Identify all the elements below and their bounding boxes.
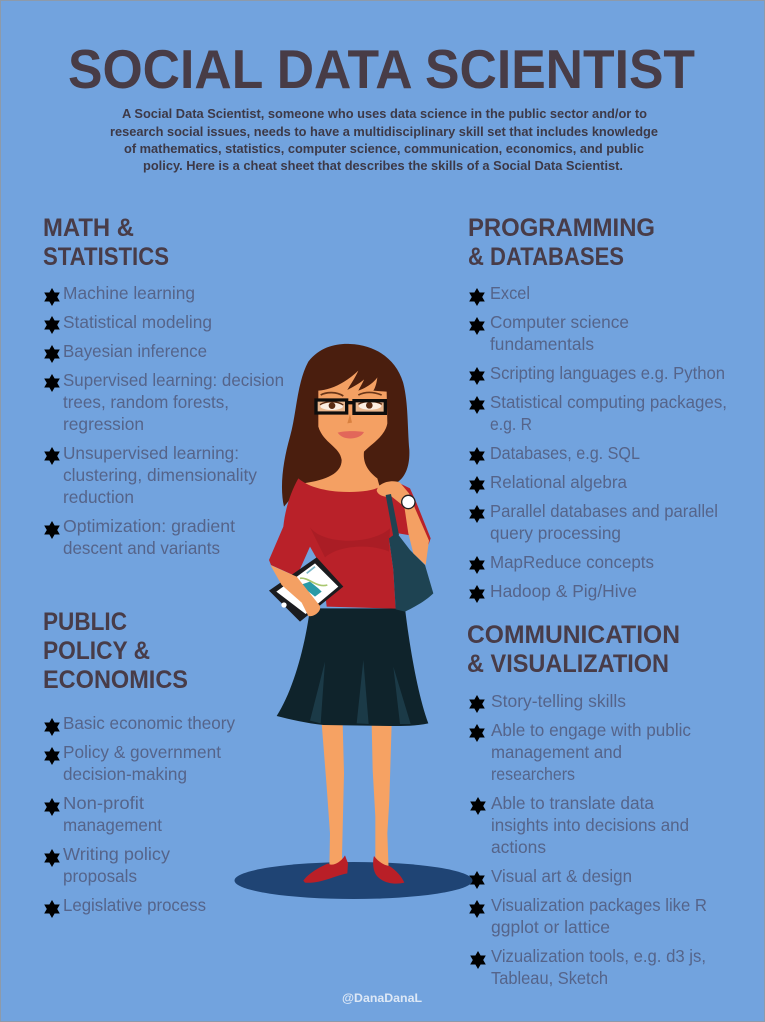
skill list: communication and visualization: Vizualization tools, e.g. d3 js, bbox=[491, 946, 706, 966]
skill list: programming and databases: Databases, e.g. SQL bbox=[490, 443, 640, 463]
skill list: public policy and economics bbox=[44, 713, 235, 918]
hair bbox=[282, 344, 409, 507]
intro text block: A Social Data Scientist, someone who uses data science in the public sector and/or to bbox=[122, 107, 647, 121]
skill list: communication and visualization: Visualization packages like R bbox=[491, 895, 707, 915]
right forearm and hand bbox=[377, 481, 429, 565]
skill list: communication and visualization: Visual art & design bbox=[491, 866, 632, 886]
skill list: programming and databases: e.g. R bbox=[490, 414, 532, 434]
heading: math and statistics bbox=[43, 214, 169, 271]
skill list: math and statistics: Optimization: gradient bbox=[63, 516, 235, 536]
skill list: programming and databases bbox=[469, 283, 727, 603]
skill list: programming and databases: Scripting languages e.g. Python bbox=[490, 363, 725, 383]
heading: public policy and economics: ECONOMICS bbox=[43, 666, 188, 694]
skill list: math and statistics: clustering, dimensionality bbox=[63, 465, 257, 485]
bag strap bbox=[386, 494, 399, 537]
glasses bbox=[316, 400, 385, 413]
skill list: communication and visualization: Tableau, Sketch bbox=[491, 968, 608, 988]
legs and shoes bbox=[303, 723, 404, 884]
heading: programming and databases: & DATABASES bbox=[468, 243, 624, 271]
skill list: public policy and economics: Policy & government bbox=[63, 742, 221, 762]
skill list: public policy and economics: decision-making bbox=[63, 764, 187, 784]
title: SOCIAL DATA SCIENTIST bbox=[68, 38, 695, 100]
skill list: public policy and economics: proposals bbox=[63, 866, 137, 886]
heading: communication and visualization bbox=[467, 621, 680, 678]
skill list: math and statistics: Bayesian inference bbox=[63, 341, 207, 361]
skill list: public policy and economics: Writing policy bbox=[63, 844, 170, 864]
illustration: woman data scientist bbox=[234, 344, 472, 899]
skill list: math and statistics: reduction bbox=[63, 487, 134, 507]
skill list: communication and visualization: management and bbox=[491, 742, 622, 762]
lips bbox=[338, 431, 364, 439]
heading: programming and databases bbox=[468, 214, 655, 271]
skill list: communication and visualization: Able to engage with public bbox=[491, 720, 691, 740]
tablet bbox=[269, 557, 343, 622]
skill list: math and statistics: descent and variants bbox=[63, 538, 220, 558]
skill list: programming and databases: Statistical computing packages, bbox=[490, 392, 727, 412]
heading: math and statistics: STATISTICS bbox=[43, 243, 169, 271]
skill list: math and statistics: Machine learning bbox=[63, 283, 195, 303]
tablet chart bbox=[300, 582, 322, 597]
panel: public policy and economics bbox=[43, 608, 235, 918]
intro text block: research social issues, needs to have a multidisciplinary skill set that includes knowledge bbox=[110, 125, 658, 139]
heading: math and statistics: MATH & bbox=[43, 214, 134, 242]
intro text block bbox=[110, 107, 658, 173]
heading: public policy and economics: POLICY & bbox=[43, 637, 150, 665]
skill list: programming and databases: Relational algebra bbox=[490, 472, 627, 492]
skill list: math and statistics: Unsupervised learning: bbox=[63, 443, 239, 463]
red top bbox=[269, 478, 431, 609]
handbag bbox=[389, 533, 433, 612]
panel: communication and visualization bbox=[467, 621, 707, 988]
skill list: math and statistics: Statistical modeling bbox=[63, 312, 212, 332]
skill list: communication and visualization: insights into decisions and bbox=[491, 815, 689, 835]
skill list: communication and visualization: researchers bbox=[491, 764, 575, 784]
heading: communication and visualization: & VISUALIZATION bbox=[467, 650, 669, 678]
heading: programming and databases: PROGRAMMING bbox=[468, 214, 655, 242]
intro text block: policy. Here is a cheat sheet that describes the skills of a Social Data Scientist. bbox=[143, 159, 623, 173]
skill list: communication and visualization: ggplot or lattice bbox=[491, 917, 610, 937]
skill list: communication and visualization: actions bbox=[491, 837, 546, 857]
skill list: communication and visualization: Able to translate data bbox=[491, 793, 654, 813]
skill list: public policy and economics: management bbox=[63, 815, 162, 835]
eyebrows bbox=[321, 392, 382, 396]
heading: public policy and economics bbox=[43, 608, 188, 694]
heading: public policy and economics: PUBLIC bbox=[43, 608, 127, 636]
skill list: public policy and economics: Non-profit bbox=[63, 793, 144, 813]
credit: @DanaDanaL bbox=[342, 991, 422, 1005]
skill list: communication and visualization: Story-telling skills bbox=[491, 691, 626, 711]
skill list: programming and databases: Hadoop & Pig/Hive bbox=[490, 581, 637, 601]
neck and face bbox=[303, 371, 387, 500]
skirt bbox=[277, 608, 428, 726]
skill list: public policy and economics: Legislative process bbox=[63, 895, 206, 915]
skill list: communication and visualization bbox=[469, 691, 707, 988]
skill list: public policy and economics: Basic economic theory bbox=[63, 713, 235, 733]
heading: communication and visualization: COMMUNICATION bbox=[467, 621, 680, 649]
skill list: math and statistics: Supervised learning: decision bbox=[63, 370, 284, 390]
skill list: programming and databases: Parallel databases and parallel bbox=[490, 501, 718, 521]
shading on top bbox=[310, 527, 390, 557]
skill list: math and statistics: regression bbox=[63, 414, 144, 434]
skill list: math and statistics: trees, random forests, bbox=[63, 392, 229, 412]
skill list: programming and databases: fundamentals bbox=[490, 334, 594, 354]
skill list: programming and databases: MapReduce concepts bbox=[490, 552, 654, 572]
skill list: programming and databases: Computer science bbox=[490, 312, 629, 332]
intro text block: of mathematics, statistics, computer science, communication, economics, and public bbox=[124, 142, 644, 156]
torso, bag and tablet bbox=[269, 478, 433, 622]
left forearm bbox=[270, 565, 320, 616]
wristwatch bbox=[402, 495, 415, 509]
eye whites and lens tint bbox=[317, 401, 385, 413]
panel: programming and databases bbox=[468, 214, 727, 603]
ground shadow ellipse bbox=[234, 862, 472, 899]
nose bbox=[347, 414, 352, 423]
panel: math and statistics bbox=[43, 214, 284, 558]
eyelids bbox=[320, 401, 382, 405]
skill list: programming and databases: query processing bbox=[490, 523, 621, 543]
skill list: math and statistics bbox=[44, 283, 284, 558]
skill list: programming and databases: Excel bbox=[490, 283, 530, 303]
